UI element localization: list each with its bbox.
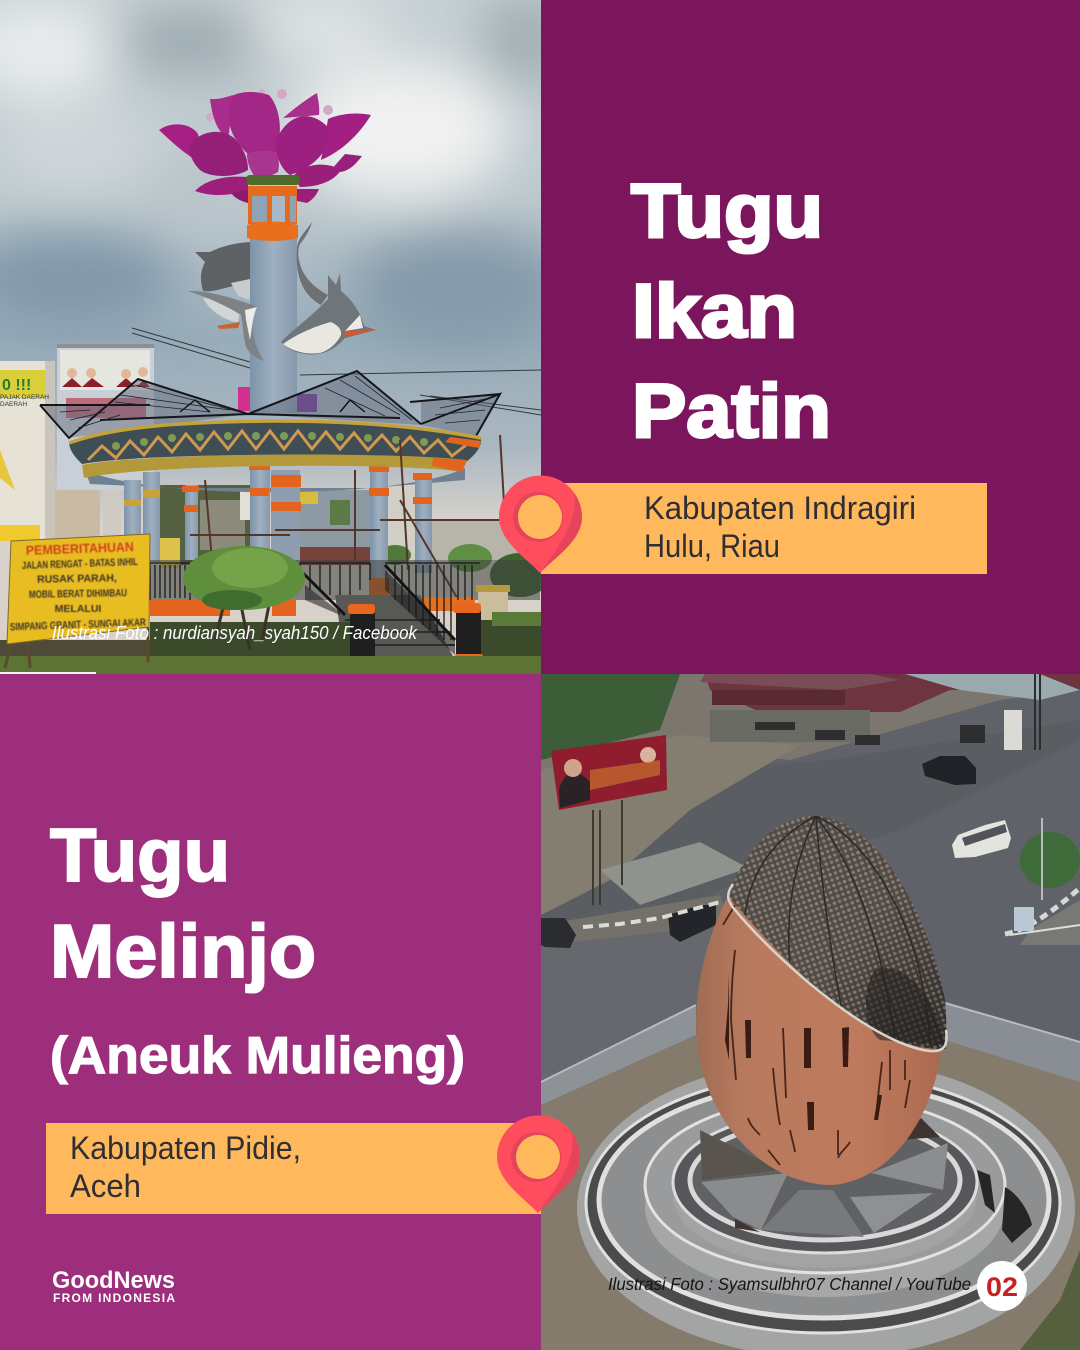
icon: location pin top: [499, 475, 582, 573]
location bar: Indragiri Hulu: Hulu, Riau: [644, 528, 780, 564]
title: Tugu Ikan Patin: Tugu: [631, 169, 823, 254]
warning sign PEMBERITAHUAN: MOBIL BERAT DIHIMBAU: [29, 587, 127, 601]
dark soil patches: [977, 1170, 1032, 1243]
iron fence and stairs: [150, 563, 480, 660]
concentric ring walls: [577, 1058, 1075, 1350]
grass: [0, 656, 541, 674]
location bar: Indragiri Hulu: [541, 483, 987, 574]
cars and van: [541, 756, 1011, 948]
ground and road: [541, 674, 1080, 1105]
catfish sculptures: [188, 222, 376, 361]
location bar: Pidie: [46, 1123, 541, 1214]
beige post: [476, 585, 510, 620]
small banners behind column: [238, 387, 317, 412]
billboard left: 0 !!!: [2, 377, 31, 394]
main column with orange bands: [247, 186, 298, 413]
power lines: [132, 328, 541, 416]
roadside building: [700, 674, 1080, 750]
title: Tugu Ikan Patin: Patin: [632, 369, 831, 454]
title: Tugu Melinjo: (Aneuk Mulieng): [50, 1027, 465, 1085]
lotus flower: [159, 89, 371, 203]
circular roof disc with zigzag band: [69, 421, 481, 478]
location bar: Pidie: Aceh: [70, 1168, 141, 1204]
page number badge: 02: [986, 1272, 1018, 1302]
panel: bottom left background: [0, 674, 541, 1350]
title: Tugu Ikan Patin: Ikan: [632, 269, 797, 354]
melinjo seed sculpture: [696, 816, 947, 1185]
road curb and tree on the right: [583, 818, 1080, 934]
roundabout base ground: [541, 1003, 1080, 1350]
background buildings and trees: [55, 485, 550, 597]
billboard left: [0, 361, 55, 541]
title: Tugu Melinjo: [50, 813, 465, 1085]
title: Tugu Melinjo: Tugu: [50, 813, 230, 897]
underside of roof: [85, 468, 465, 492]
title: Tugu Ikan Patin: [631, 169, 831, 454]
roof wire frames: [40, 371, 500, 438]
centre spokes: [700, 1118, 948, 1237]
sky with clouds: [0, 0, 570, 674]
green bush: [183, 546, 305, 650]
warning sign PEMBERITAHUAN: JALAN RENGAT - BATAS INHIL: [22, 556, 138, 572]
warning sign PEMBERITAHUAN: [5, 534, 150, 668]
red billboard: [551, 735, 667, 905]
low hedges: [0, 612, 541, 660]
warning sign PEMBERITAHUAN: PEMBERITAHUAN: [26, 539, 134, 558]
photo: Tugu Ikan Patin: [0, 0, 570, 674]
lower base with orange bands: [150, 560, 540, 616]
grass corner: [1020, 1250, 1080, 1350]
warning sign PEMBERITAHUAN: MELALUI: [55, 603, 101, 615]
billboard left: PAJAK DAERAH: [0, 394, 49, 401]
location bar: Pidie: Kabupaten Pidie,: [70, 1130, 301, 1166]
scaffolding: [190, 435, 505, 597]
title: Tugu Melinjo: Melinjo: [50, 909, 316, 993]
caption top photo: Ilustrasi Foto : nurdiansyah_syah150 / Facebook: [52, 622, 419, 643]
warning sign PEMBERITAHUAN: SIMPANG GRANIT - SUNGAI AKAR: [10, 617, 146, 633]
logo: GoodNews from Indonesia: GoodNews: [52, 1267, 175, 1294]
billboard left: DAERAH: [0, 401, 27, 408]
location bar: Indragiri Hulu: Kabupaten Indragiri: [644, 490, 916, 526]
caption bottom photo: Ilustrasi Foto : Syamsulbhr07 Channel / YouTube: [608, 1274, 971, 1294]
billboard with portraits: [57, 344, 154, 490]
warning sign PEMBERITAHUAN: RUSAK PARAH,: [37, 572, 117, 586]
monument columns: [124, 463, 432, 596]
black gate pillars: [348, 603, 483, 656]
page number badge: [977, 1261, 1027, 1311]
logo: GoodNews from Indonesia: FROM INDONESIA: [53, 1291, 175, 1305]
icon: location pin bottom: [497, 1116, 580, 1213]
panel: top right background: [541, 0, 1080, 674]
photo: Tugu Melinjo: [541, 674, 1080, 1350]
